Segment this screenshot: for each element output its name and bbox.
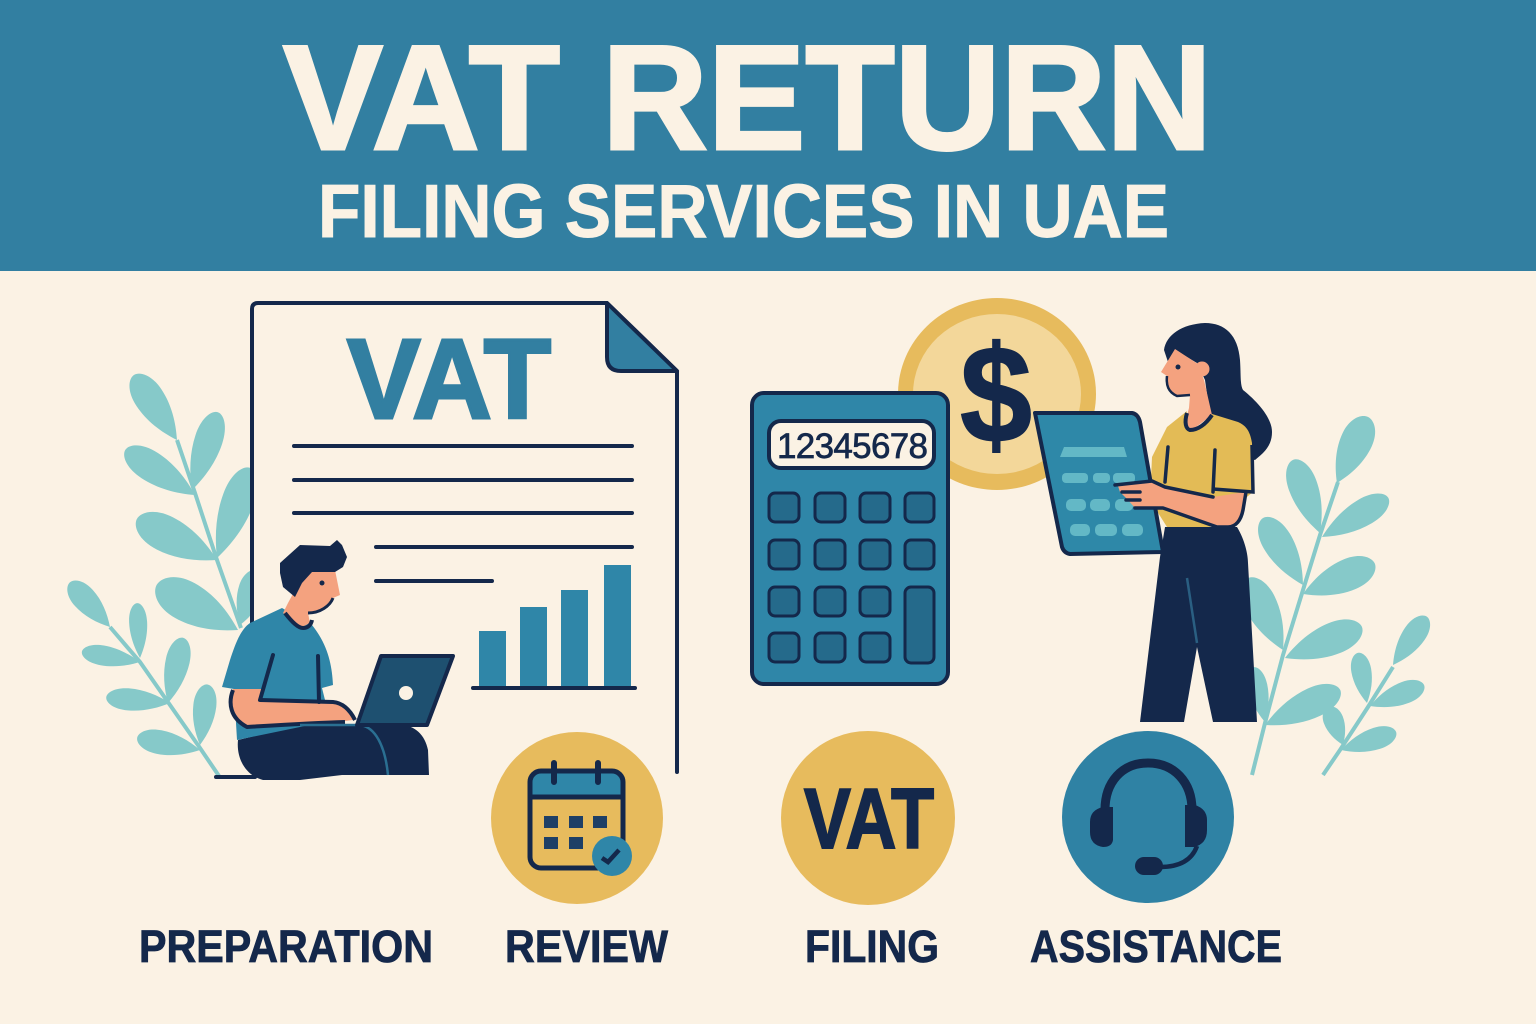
label: filing: FILING [805,921,939,972]
document VAT heading: VAT [347,316,551,442]
person with laptop [216,540,453,780]
document lines [294,446,632,581]
subtitle: FILING SERVICES IN UAE [318,169,1169,253]
legs [238,725,429,780]
arm [230,689,353,727]
right plants [1234,410,1436,775]
panel: filing icon: VAT [804,772,934,867]
label: assistance: ASSISTANCE [1030,921,1282,972]
label: preparation: PREPARATION [139,921,433,972]
left plants [61,367,270,776]
hair [280,540,347,597]
arm and hand [1117,481,1245,527]
microphone [1160,846,1197,867]
document [252,303,677,772]
panel: assistance icon [1062,731,1234,903]
shirt [1150,411,1253,527]
document folded corner [607,303,677,371]
woman with tablet [1035,323,1272,722]
check badge [592,836,632,876]
title: RETURN [602,14,1212,181]
dollar sign: $ [960,318,1032,472]
headset band [1105,763,1192,810]
document bar chart [473,565,635,688]
hair [1164,323,1272,460]
calculator keys [769,493,934,663]
trousers [1140,527,1257,722]
ear cups [1090,807,1113,847]
title [283,14,1212,181]
panel: filing icon [781,731,955,905]
tablet [1035,413,1163,554]
calculator display [769,421,934,468]
panel: review icon [491,732,663,904]
label: review: REVIEW [505,921,668,972]
header banner [0,0,1536,271]
title: VAT [283,14,560,181]
neck and face [283,570,340,628]
calculator: 12345678 [777,427,928,466]
torso [222,608,333,740]
calendar [530,771,623,797]
coin [898,298,1096,490]
face and neck [1161,349,1212,430]
laptop [357,656,453,725]
calculator [752,393,948,684]
tablet screen [1060,447,1143,536]
